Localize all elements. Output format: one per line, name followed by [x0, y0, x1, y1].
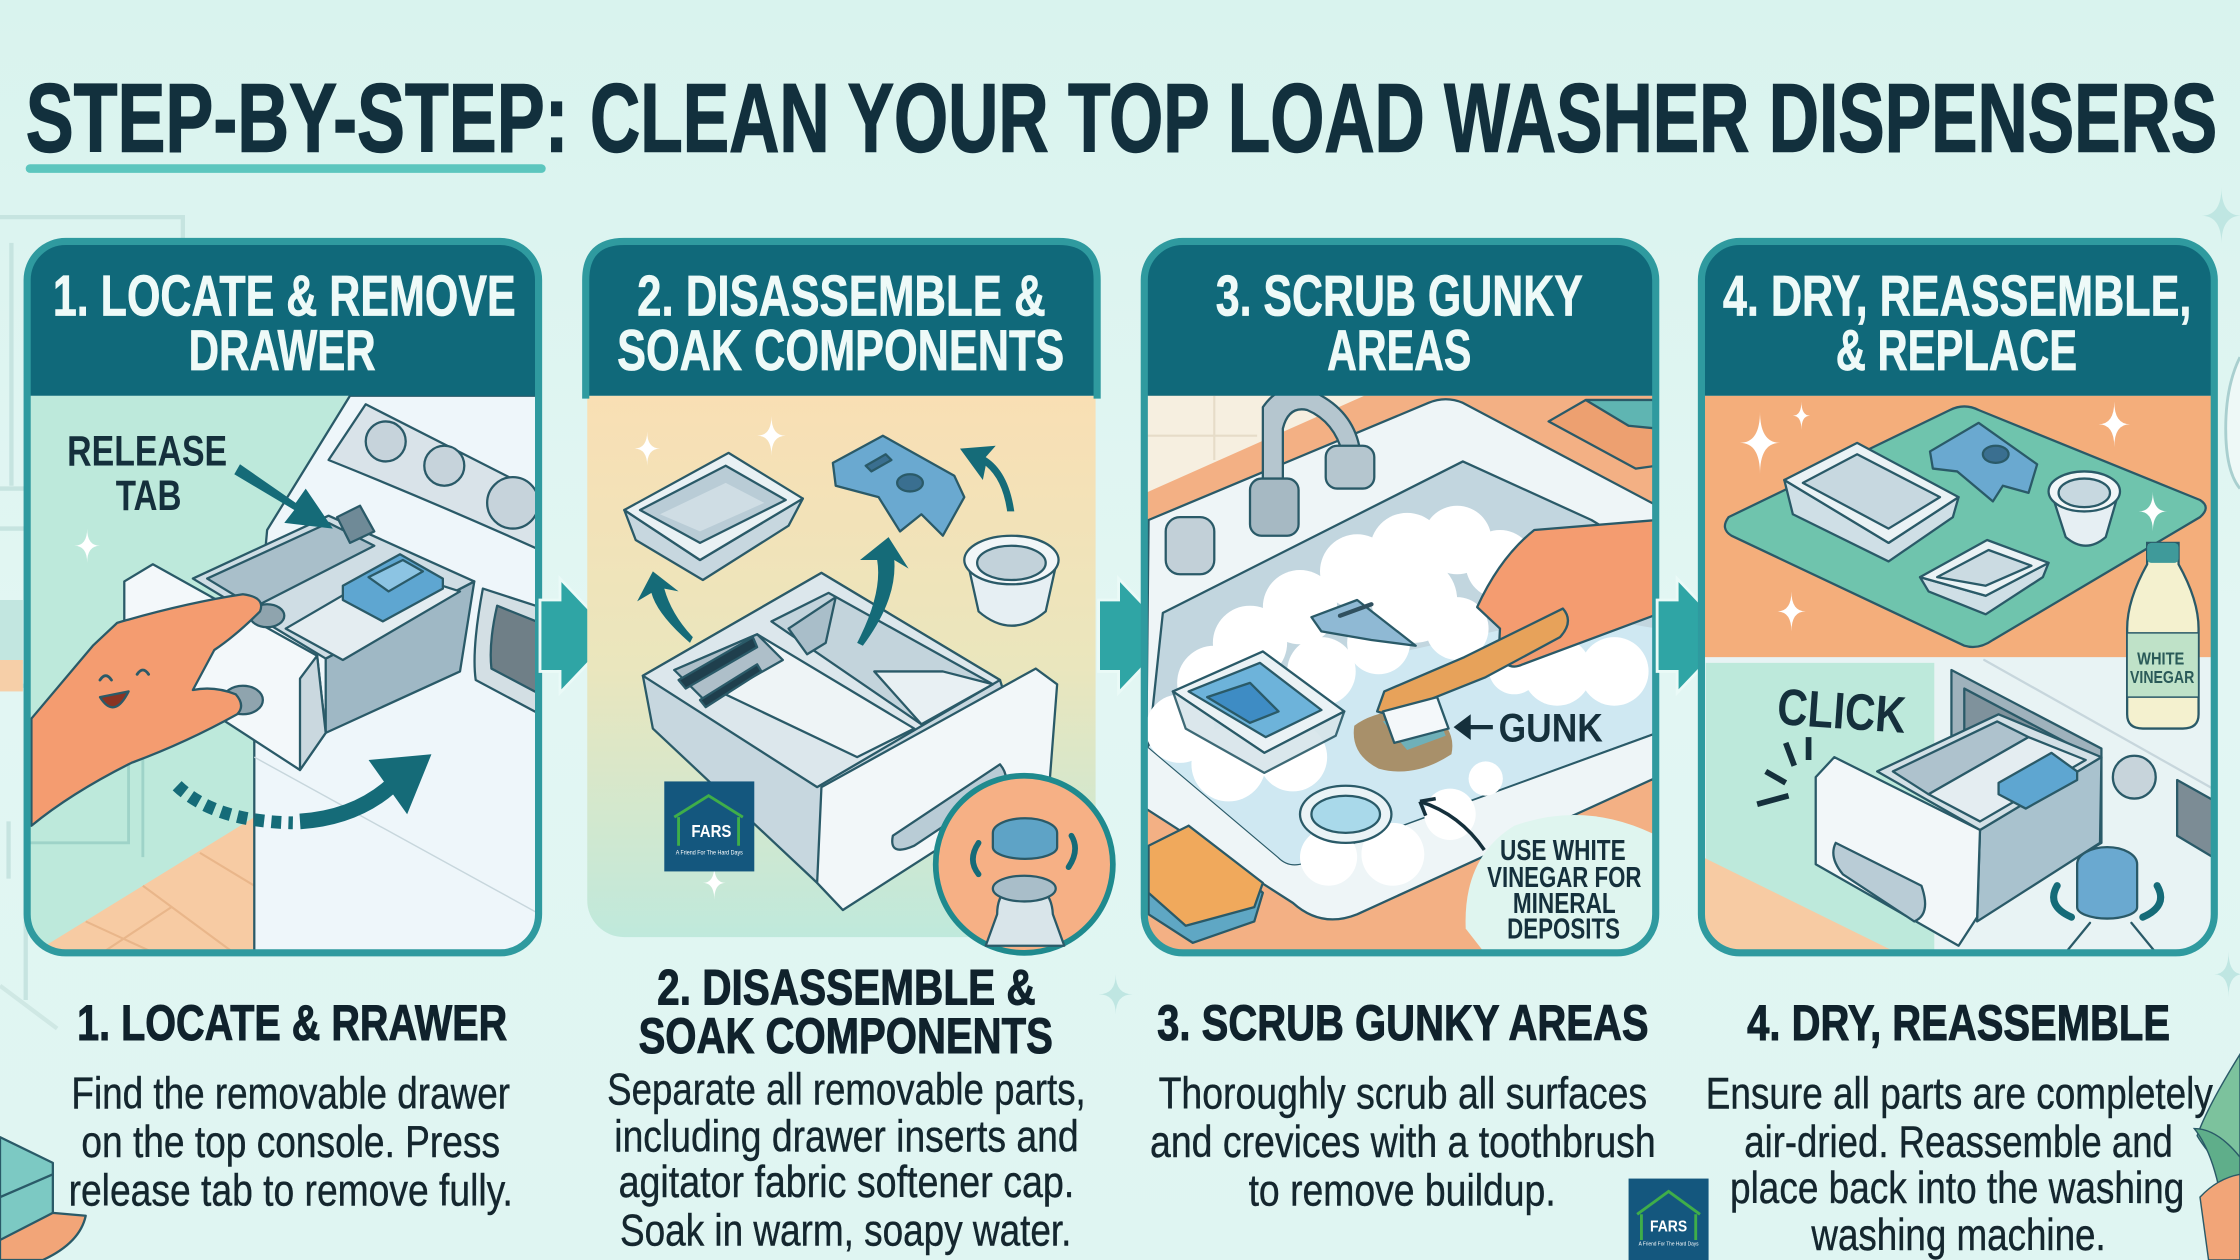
callout text: VINEGAR FOR: [1487, 862, 1642, 894]
icon: vinegar bottle: [2127, 543, 2199, 729]
hand: [1477, 520, 1657, 667]
icon: cup: [964, 536, 1059, 626]
header text: 3. SCRUB GUNKY: [1216, 265, 1583, 329]
arrow: step 1 to 2: [540, 579, 614, 693]
panel: step 4: [1701, 241, 2214, 957]
arrow: step 2 to 3: [1099, 579, 1173, 693]
mint wall: [1706, 663, 1934, 954]
arrow: callout to tray: [1420, 799, 1484, 850]
step 3 caption: Thoroughly scrub all surfaces: [1159, 1070, 1647, 1119]
step 3 caption: and crevices with a toothbrush: [1150, 1118, 1656, 1167]
header text: [617, 265, 1064, 383]
agitator cap: [2054, 847, 2161, 954]
label: release tab: RELEASE: [67, 428, 227, 476]
step 2 caption: Separate all removable parts,: [607, 1065, 1086, 1114]
step 2 caption: SOAK COMPONENTS: [639, 1008, 1053, 1064]
icon: vinegar bottle: WHITE: [2137, 648, 2184, 668]
drawer: [643, 573, 1057, 910]
washer front: [1951, 660, 2213, 914]
sparkle right bottom: [2214, 951, 2240, 997]
logo: A Friend For The Hard Days: [676, 849, 743, 856]
basin: [1149, 461, 1657, 864]
gunk: [1354, 710, 1452, 771]
header text: 2. DISASSEMBLE &: [637, 265, 1046, 329]
header text: [1216, 265, 1583, 383]
drawer: [124, 506, 474, 770]
header text: SOAK COMPONENTS: [617, 319, 1064, 383]
logo bottom: FARS: [1650, 1218, 1687, 1235]
step 1 caption: [69, 995, 513, 1216]
arrow: to tab: [234, 464, 333, 529]
small tray: [1920, 540, 2049, 614]
faucet: [1166, 387, 1374, 574]
step 4 caption: [1706, 995, 2214, 1260]
callout text: USE WHITE: [1500, 835, 1626, 867]
arrows: parts lifting: [637, 446, 1014, 646]
header band: [29, 243, 537, 396]
drying mat: [1725, 406, 2206, 647]
step 3 caption: 3. SCRUB GUNKY AREAS: [1157, 995, 1649, 1051]
step 3 caption: to remove buildup.: [1249, 1167, 1556, 1216]
step 2 caption: 2. DISASSEMBLE &: [657, 959, 1036, 1015]
callout text: [1487, 835, 1642, 946]
step 3 caption: [1150, 995, 1656, 1216]
sparkle: [74, 529, 100, 563]
cup: [2049, 471, 2120, 546]
water: [1149, 614, 1657, 864]
foam: [1146, 506, 1649, 886]
title: STEP-BY-STEP:: [26, 63, 569, 172]
panel: step 2: [586, 241, 1113, 953]
icon: tray: [624, 453, 803, 580]
step 2 caption: including drawer inserts and: [614, 1112, 1079, 1161]
panel border: [27, 241, 539, 953]
arrow: pull out: [177, 754, 431, 823]
floor: [48, 818, 254, 950]
step 2 caption: [607, 959, 1086, 1256]
impact marks: [1757, 737, 1809, 804]
header band: [1703, 243, 2213, 396]
panel border: [1701, 241, 2214, 953]
control panel: [329, 404, 540, 550]
sparkles: [634, 416, 786, 900]
step 1 caption: on the top console. Press: [81, 1118, 500, 1167]
step 2 caption: Soak in warm, soapy water.: [620, 1207, 1071, 1256]
label: gunk: GUNK: [1499, 706, 1603, 750]
header text: [53, 265, 516, 383]
sparkles: [1740, 401, 2167, 631]
cup in water: [1300, 786, 1391, 843]
sparkle centre bottom: [1099, 974, 1133, 1014]
wall tiles: [1146, 396, 1364, 493]
header text: 1. LOCATE & REMOVE: [53, 265, 516, 329]
step 4 caption: washing machine.: [1811, 1211, 2106, 1260]
step 2 caption: agitator fabric softener cap.: [619, 1158, 1074, 1207]
tray: [1784, 443, 1959, 561]
inset circle: agitator cap: [936, 776, 1113, 953]
drawer: [1816, 714, 2101, 946]
header text: DRAWER: [189, 319, 376, 383]
background: bottle right edge: [2226, 357, 2240, 489]
toothbrush: [1377, 609, 1568, 743]
label: release tab: TAB: [116, 472, 181, 520]
background: kitchen decor left: [0, 217, 183, 1029]
logo bottom: A Friend For The Hard Days: [1639, 1242, 1699, 1248]
background: towels bottom left: [0, 1137, 86, 1260]
washer window: [475, 589, 540, 714]
washer body: [254, 396, 540, 954]
cabinet: [30, 759, 144, 857]
background: plant bottom right: [2194, 1054, 2240, 1260]
sparkle top right: [2201, 187, 2240, 244]
header band: [1146, 243, 1654, 396]
arrow: step 3 to 4: [1657, 579, 1731, 693]
panel: step 1: [27, 241, 540, 956]
logo: FARS: [691, 821, 731, 841]
soap dish: [1549, 400, 1657, 469]
header text: [1723, 265, 2191, 383]
sink rim: [1146, 399, 1657, 919]
panel: step 3: [1144, 241, 1657, 956]
floor: [1705, 858, 1890, 950]
blue part in foam: [1311, 600, 1416, 646]
sponge: [1149, 826, 1263, 943]
gunk centre: [1383, 721, 1446, 750]
header text: & REPLACE: [1836, 319, 2077, 383]
callout text: MINERAL: [1513, 888, 1616, 920]
title underline: [26, 164, 546, 173]
header band: [587, 243, 1096, 396]
logo: [664, 781, 754, 871]
label: release tab: [67, 428, 227, 520]
blue cap: [1930, 423, 2037, 501]
label: click: CLICK: [1776, 677, 1908, 744]
callout text: DEPOSITS: [1507, 914, 1620, 946]
step 1 caption: Find the removable drawer: [71, 1070, 510, 1119]
icon: blue cap: [833, 436, 964, 536]
label: gunk: [1457, 706, 1603, 750]
panel border: [1144, 241, 1656, 953]
logo bottom: [1629, 1179, 1709, 1260]
header text: AREAS: [1327, 319, 1471, 383]
icon: hand pressing tab: [31, 594, 261, 826]
step 1 caption: release tab to remove fully.: [69, 1167, 513, 1216]
callout: [1466, 815, 1657, 954]
icon: vinegar bottle: VINEGAR: [2130, 667, 2195, 687]
step 1 caption: 1. LOCATE & RRAWER: [77, 995, 507, 1051]
panel border: [586, 241, 1097, 399]
tray in water: [1173, 651, 1344, 773]
